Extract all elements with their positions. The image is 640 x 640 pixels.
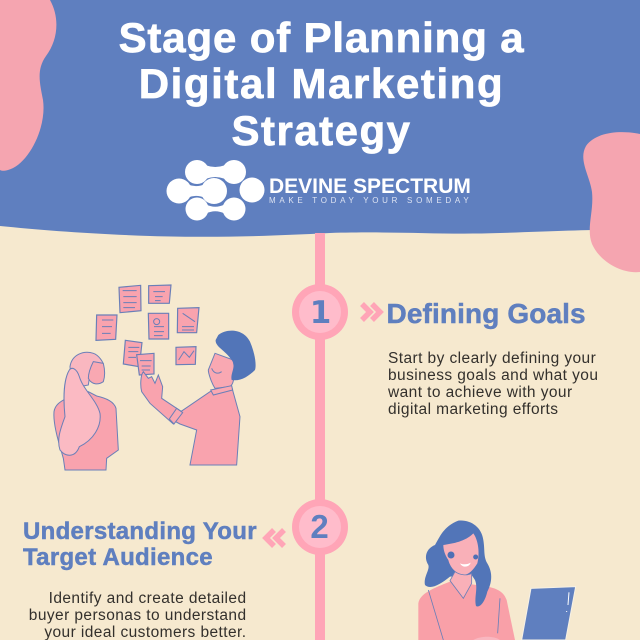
right pink blob (583, 132, 640, 272)
illustration: woman with laptop (418, 521, 576, 640)
title (119, 14, 524, 154)
step 1 text: Start by clearly defining your (388, 350, 596, 366)
logo icon (166, 160, 264, 220)
left pink blob (0, 0, 56, 171)
step 1 text: want to achieve with your (388, 384, 573, 400)
step 2 text (29, 590, 246, 640)
header wave background (0, 0, 640, 237)
step 2 heading: Target Audience (23, 544, 213, 571)
title: Stage of Planning a (119, 14, 524, 60)
step 2 heading (23, 518, 257, 571)
step 2 text: Identify and create detailed (49, 590, 246, 607)
title: Digital Marketing (139, 60, 504, 107)
illustration: sticky notes (96, 285, 199, 375)
step 2 chevrons (266, 530, 284, 546)
step 2 text: buyer personas to understand (29, 607, 246, 624)
step 2 marker: 2 (310, 508, 329, 545)
step 1 marker: 1 (310, 295, 331, 331)
logo tagline: MAKE TODAY YOUR SOMEDAY (269, 196, 472, 205)
step 1 marker (292, 284, 348, 340)
step 2 marker (292, 499, 348, 555)
logo wordmark: DEVINE SPECTRUM (269, 175, 471, 198)
step 1 text: business goals and what you (388, 366, 598, 384)
step 1 text (388, 350, 598, 418)
step 2 heading: Understanding Your (23, 518, 257, 544)
illustration: man reaching up (141, 331, 256, 465)
step 1 chevrons (362, 304, 380, 320)
step 1 text: digital marketing efforts (388, 400, 558, 418)
timeline line (315, 233, 325, 640)
step 1 heading: Defining Goals (386, 298, 586, 329)
title: Strategy (231, 106, 412, 154)
illustration: woman looking up (54, 352, 118, 470)
